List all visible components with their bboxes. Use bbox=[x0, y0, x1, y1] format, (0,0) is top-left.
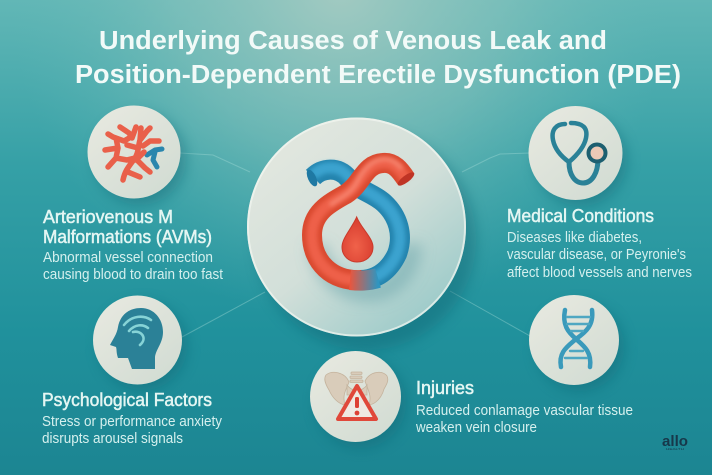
panel: injuries bbox=[310, 351, 633, 448]
logo: allo: HEALTH bbox=[666, 447, 684, 451]
icon: branching vessels bbox=[105, 127, 162, 180]
text: description: Diseases like diabetes, bbox=[507, 230, 642, 246]
panel: medical conditions bbox=[507, 106, 692, 281]
panel: central vessel illustration bbox=[247, 118, 476, 350]
icon: red artery tube bbox=[312, 159, 416, 281]
icon: pelvis disc bbox=[310, 351, 401, 442]
icon: pelvis bbox=[325, 372, 388, 405]
title: Underlying Causes of Venous Leak and bbox=[99, 27, 607, 55]
icon: head disc bbox=[93, 296, 182, 384]
icon: DNA disc bbox=[529, 295, 619, 385]
panel: arteriovenous malformations bbox=[43, 106, 223, 283]
panel: psychological factors bbox=[42, 296, 223, 447]
title bbox=[75, 27, 681, 89]
logo: allo: allo bbox=[662, 434, 688, 450]
icon: blood drop bbox=[342, 217, 373, 262]
text: description bbox=[42, 414, 223, 447]
text: description: affect blood vessels and nerves bbox=[507, 265, 692, 281]
text: description: Abnormal vessel connection bbox=[43, 250, 213, 266]
text: description: disrupts arousel signals bbox=[42, 431, 183, 447]
text: heading bbox=[43, 207, 212, 247]
text: description bbox=[507, 230, 692, 281]
panel: genetic factors bbox=[529, 295, 624, 391]
text: description bbox=[43, 250, 223, 283]
title: Position-Dependent Erectile Dysfunction (PDE) bbox=[75, 61, 681, 89]
icon: DNA helix bbox=[560, 310, 592, 367]
text: description: vascular disease, or Peyronie's bbox=[507, 247, 686, 263]
icon: head silhouette bbox=[110, 308, 163, 369]
text: description bbox=[415, 403, 633, 436]
text: heading: Injuries bbox=[416, 378, 474, 398]
text: heading: Malformations (AVMs) bbox=[43, 227, 212, 247]
icon: stethoscope bbox=[553, 123, 606, 183]
icon: blue vein tube bbox=[305, 168, 400, 280]
icon: warning triangle bbox=[338, 386, 376, 419]
icon: AVM disc bbox=[88, 106, 180, 198]
text: description: Stress or performance anxiety bbox=[42, 414, 223, 430]
text: description: weaken vein closure bbox=[415, 420, 537, 436]
text: heading: Psychological Factors bbox=[42, 390, 212, 410]
text: heading: Medical Conditions bbox=[507, 206, 654, 226]
text: description: causing blood to drain too fast bbox=[43, 267, 223, 283]
icon: stethoscope disc bbox=[528, 106, 622, 200]
text: description: Reduced conlamage vascular tissue bbox=[416, 403, 633, 419]
text: heading: Arteriovenous M bbox=[43, 207, 173, 227]
